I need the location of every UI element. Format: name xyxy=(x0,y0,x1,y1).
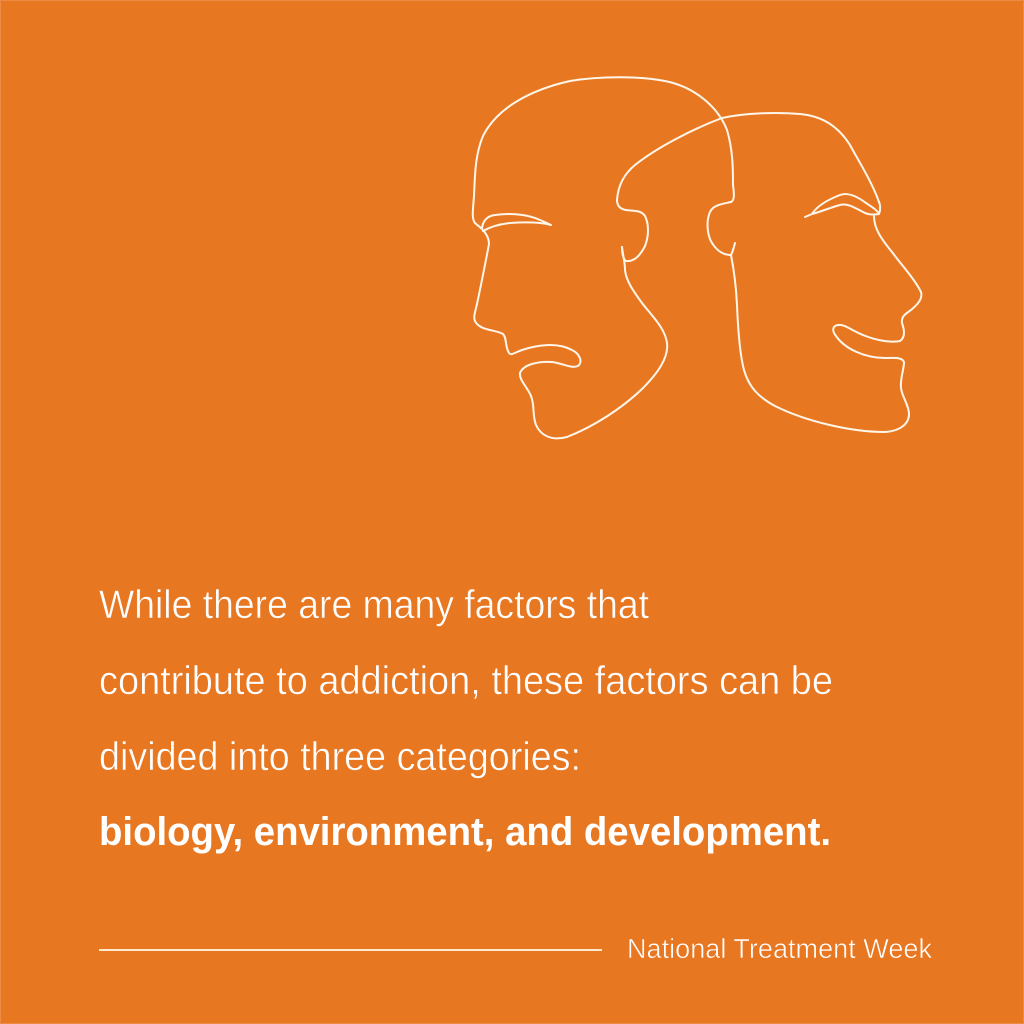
footer label: National Treatment Week xyxy=(627,933,933,964)
text line 3: divided into three categories: xyxy=(99,735,581,779)
right face ear and jaw xyxy=(708,202,921,432)
left face eyebrow xyxy=(482,214,551,231)
text line 1: While there are many factors that xyxy=(99,583,649,627)
body text xyxy=(99,583,833,854)
text line 2: contribute to addiction, these factors can be xyxy=(99,659,833,703)
footer rule xyxy=(99,949,602,951)
right face brow and forehead join xyxy=(805,194,880,217)
text line 4, bold conclusion: biology, environment, and development. xyxy=(99,810,831,854)
left face outline xyxy=(617,113,879,261)
illustration: two overlapping one-line faces xyxy=(473,77,921,438)
